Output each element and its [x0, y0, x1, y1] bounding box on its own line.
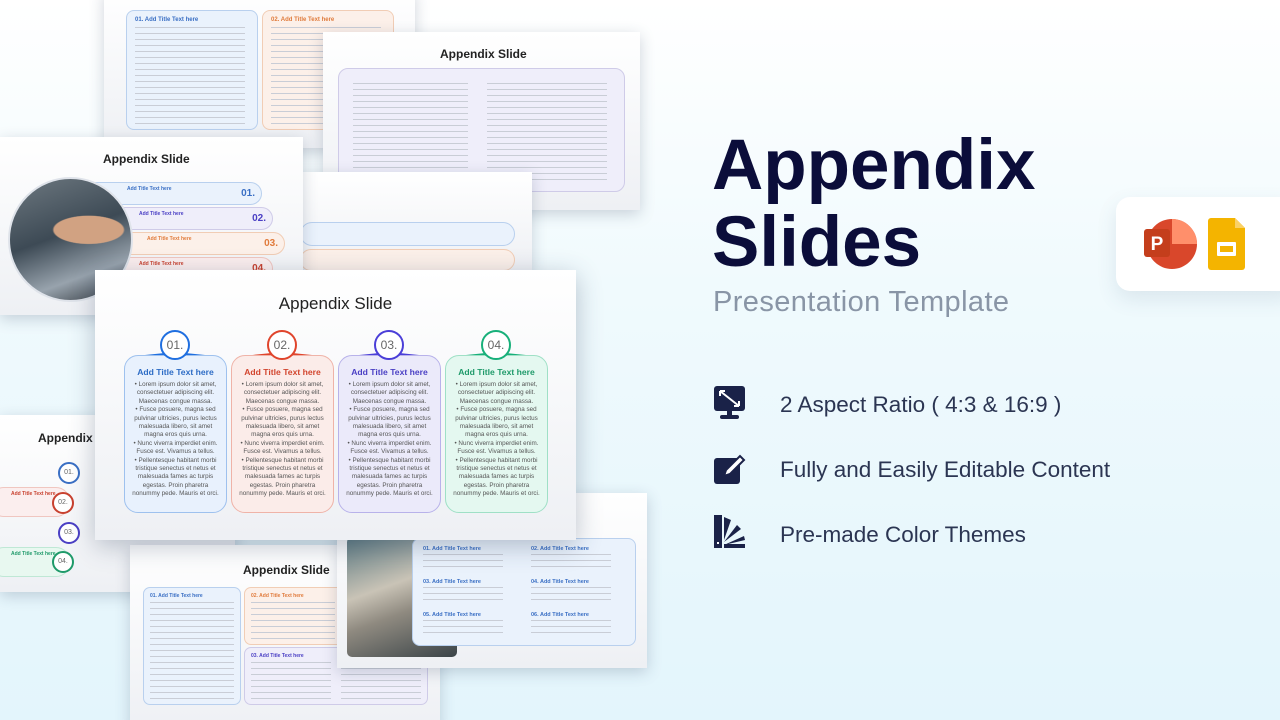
slide: main featured: • Fusce posuere, magna sed pulvinar ultricies, purus lectus malesuada libero, sit amet magna eros quis urna. — [134, 406, 217, 438]
slide: main featured: 03. — [381, 338, 397, 352]
row 03: 03. — [264, 238, 278, 249]
panel: purple: 03. Add Title Text here — [251, 653, 304, 659]
icon: powerpoint — [1144, 219, 1197, 269]
panel: six items: 03. Add Title Text here — [423, 579, 481, 585]
slide: main featured: • Fusce posuere, magna sed pulvinar ultricies, purus lectus malesuada libero, sit amet magna eros quis urna. — [241, 406, 324, 438]
slide: left with circle photo — [0, 137, 303, 315]
slide: main featured: • Nunc viverra imperdiet enim. Fusce est. Vivamus a tellus. — [347, 440, 432, 455]
slide: main featured: • Nunc viverra imperdiet enim. Fusce est. Vivamus a tellus. — [133, 440, 218, 455]
row 04 — [100, 257, 273, 280]
slide: main featured: 02. — [274, 338, 290, 352]
slide: main featured: 01. — [167, 338, 183, 352]
text: Fully and Easily Editable Content — [780, 457, 1110, 482]
app icons card — [1116, 197, 1280, 291]
text: Pre-made Color Themes — [780, 522, 1026, 547]
panel: six items: 01. Add Title Text here — [423, 546, 481, 552]
photo: laptop circle — [8, 177, 133, 302]
slide: right background — [323, 32, 640, 210]
card 04 — [445, 330, 548, 513]
slide: main featured: • Pellentesque habitant morbi tristique senectus et netus et malesuada fames ac turpis egestas. Proin pharetra nonummy pede. Mauris et orci. — [132, 457, 219, 497]
photo: laptop — [347, 537, 457, 657]
panel: blue column — [143, 587, 241, 705]
panel: orange — [244, 587, 344, 645]
slide: left middle — [0, 415, 235, 592]
icon: edit — [714, 454, 746, 484]
slide: right background: Appendix Slide — [440, 47, 527, 61]
panel: orange list: 02. Add Title Text here — [271, 17, 334, 23]
slide: top background — [104, 0, 415, 148]
slide: main featured: Add Title Text here — [351, 367, 428, 377]
icon: swatches — [714, 515, 745, 548]
slide: main featured: Add Title Text here — [458, 367, 535, 377]
row 04: 04. — [252, 263, 266, 274]
panel: purple text — [338, 68, 625, 192]
slide: main featured: Add Title Text here — [137, 367, 214, 377]
slide: main featured: • Lorem ipsum dolor sit amet, consectetuer adipiscing elit. Maecenas congue massa. — [242, 381, 323, 405]
slide: bottom — [130, 545, 440, 720]
subtitle: Presentation Template — [713, 286, 1009, 318]
row 04: Add Title Text here — [139, 261, 184, 267]
panel: six items — [412, 538, 636, 646]
panel: blue list: 01. Add Title Text here — [135, 17, 198, 23]
panel: six items: 02. Add Title Text here — [531, 546, 589, 552]
slide: main featured: • Lorem ipsum dolor sit amet, consectetuer adipiscing elit. Maecenas congue massa. — [456, 381, 537, 405]
panel: blue column: 01. Add Title Text here — [150, 593, 203, 599]
feature: aspect ratio — [714, 386, 1061, 419]
slide: main featured: • Pellentesque habitant morbi tristique senectus et netus et malesuada fames ac turpis egestas. Proin pharetra nonummy pede. Mauris et orci. — [453, 457, 540, 497]
icon: monitor — [714, 386, 745, 419]
row 01: 01. — [241, 188, 255, 199]
slide: left middle: 04. — [58, 558, 68, 565]
slide: left middle: 03. — [64, 529, 74, 536]
slide: main featured: • Pellentesque habitant morbi tristique senectus et netus et malesuada fames ac turpis egestas. Proin pharetra nonummy pede. Mauris et orci. — [239, 457, 326, 497]
title — [712, 126, 1035, 282]
slide: main featured: • Nunc viverra imperdiet enim. Fusce est. Vivamus a tellus. — [454, 440, 539, 455]
panel: purple — [244, 647, 428, 705]
icon: google slides — [1208, 218, 1245, 270]
row 02 — [100, 207, 273, 230]
card 03 — [338, 330, 441, 513]
panel: blue list — [126, 10, 258, 130]
row 01 — [80, 182, 262, 205]
row 02: Add Title Text here — [139, 211, 184, 217]
slide: main featured: • Fusce posuere, magna sed pulvinar ultricies, purus lectus malesuada libero, sit amet magna eros quis urna. — [455, 406, 538, 438]
text: 2 Aspect Ratio ( 4:3 & 16:9 ) — [780, 392, 1061, 417]
row 02: 02. — [252, 213, 266, 224]
icon: powerpoint: P — [1151, 234, 1164, 255]
slide: left middle: 01. — [64, 469, 74, 476]
slide: main featured: • Pellentesque habitant morbi tristique senectus et netus et malesuada fames ac turpis egestas. Proin pharetra nonummy pede. Mauris et orci. — [346, 457, 433, 497]
slide: main featured: 04. — [488, 338, 504, 352]
panel: six items: 06. Add Title Text here — [531, 612, 589, 618]
feature: editable — [714, 454, 1110, 484]
slide: main featured: • Fusce posuere, magna sed pulvinar ultricies, purus lectus malesuada libero, sit amet magna eros quis urna. — [348, 406, 431, 438]
main slide title: Appendix Slide — [279, 294, 392, 313]
panel: six items: 04. Add Title Text here — [531, 579, 589, 585]
row 03 — [110, 232, 285, 255]
slide: middle background rows — [290, 172, 532, 272]
title: Slides — [712, 203, 921, 282]
slide: left with circle photo: Appendix Slide — [103, 152, 190, 166]
slide: main featured: Add Title Text here — [244, 367, 321, 377]
slide: left middle: Appendix S — [38, 431, 104, 445]
slide: main featured: • Nunc viverra imperdiet enim. Fusce est. Vivamus a tellus. — [240, 440, 325, 455]
panel: orange: 02. Add Title Text here — [251, 593, 304, 599]
card 01 — [124, 330, 227, 513]
slide: bottom: Appendix Slide — [243, 563, 330, 577]
slide: main featured: • Lorem ipsum dolor sit amet, consectetuer adipiscing elit. Maecenas congue massa. — [135, 381, 216, 405]
row 01: Add Title Text here — [127, 186, 172, 192]
slide: left middle: Add Title Text here — [11, 491, 56, 497]
panel: orange list — [262, 10, 394, 130]
slide: left middle: Add Title Text here — [11, 551, 56, 557]
row 03: Add Title Text here — [147, 236, 192, 242]
title: Appendix — [712, 126, 1035, 205]
panel: six items: 05. Add Title Text here — [423, 612, 481, 618]
card 02 — [231, 330, 334, 513]
slide: main featured: • Lorem ipsum dolor sit amet, consectetuer adipiscing elit. Maecenas congue massa. — [349, 381, 430, 405]
feature: color themes — [714, 515, 1026, 548]
slide: bottom right with photo — [337, 493, 647, 668]
slide: left middle: 02. — [58, 499, 68, 506]
slide: main featured — [95, 270, 576, 540]
